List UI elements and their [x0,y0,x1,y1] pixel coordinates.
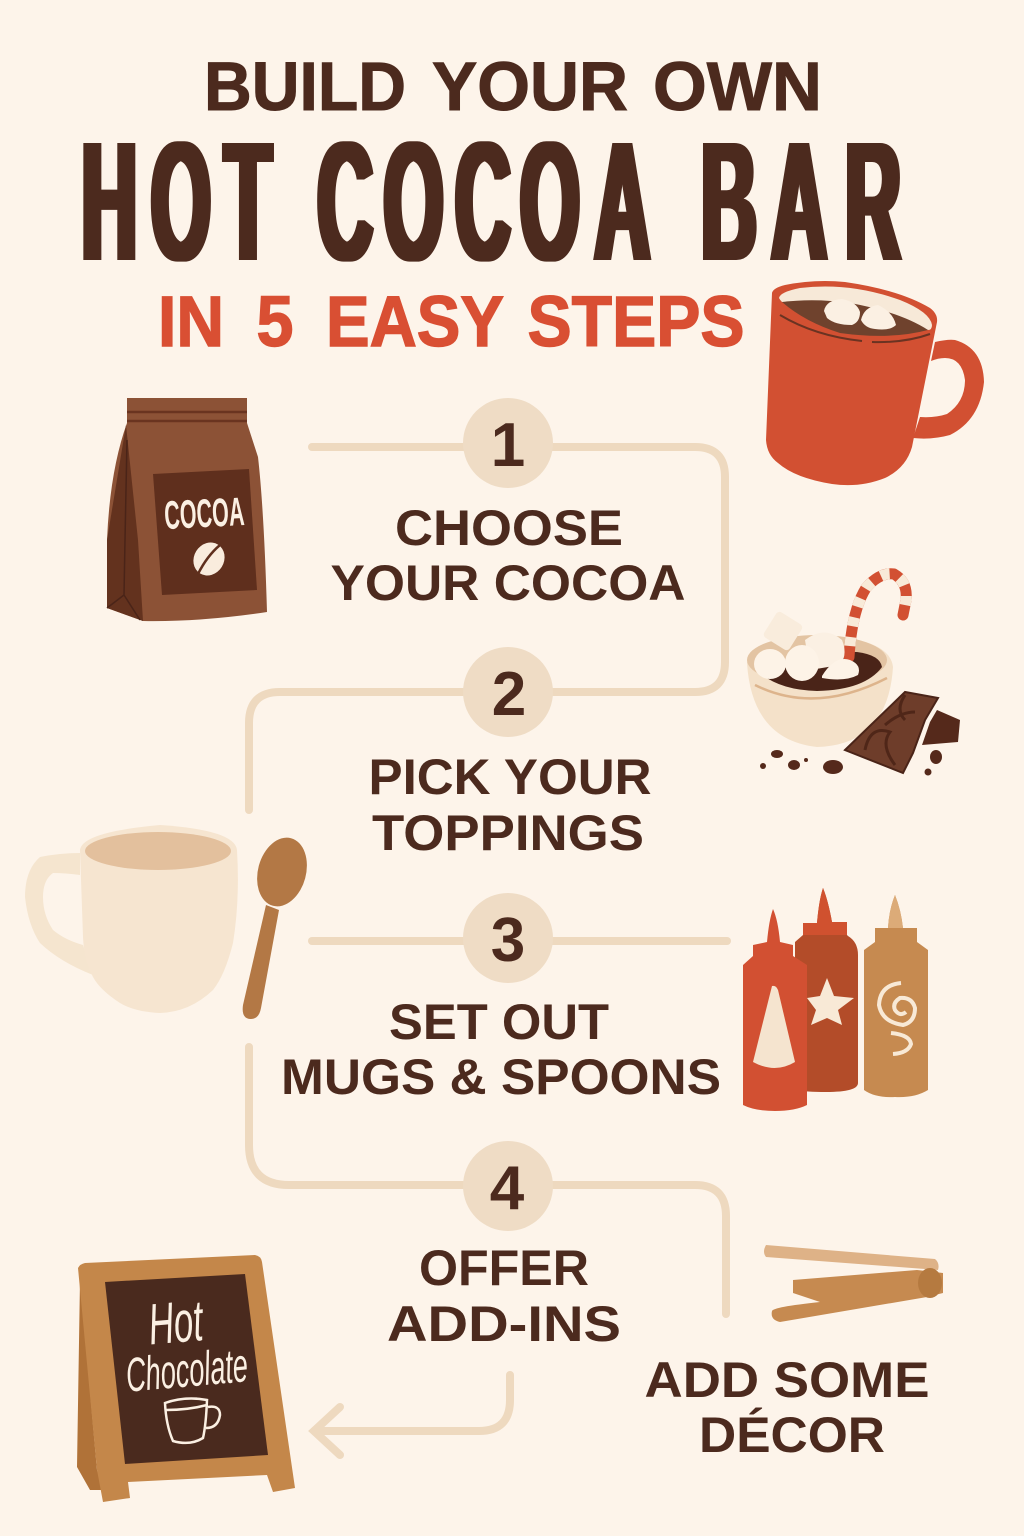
subtitle: in 5 easy steps [158,283,744,362]
title: build your own: OWN [653,48,822,125]
title: build your own: BUILD [204,48,406,125]
step 1 [330,398,686,611]
step 3: MUGS & SPOONS [281,1049,721,1105]
step 4: ADD-INS [387,1296,621,1352]
connector path [249,447,727,1455]
icon: hot chocolate sign: Chocolate [124,1339,250,1403]
icon: syrup bottles [743,888,928,1111]
step 3: SET OUT [389,994,609,1050]
step 5: add some decor: ADD SOME [644,1352,930,1408]
step 2: PICK YOUR [368,749,652,805]
step 1: YOUR COCOA [330,555,686,611]
title: hot cocoa bar: BAR [701,107,901,296]
step 3: 3 [491,906,525,975]
title: hot cocoa bar: COCOA [318,107,650,296]
step 2: TOPPINGS [372,805,644,861]
icon: bowl with marshmallows, candy cane, chocolate [747,574,960,776]
step 4 [387,1141,621,1352]
icon: red mug with marshmallows [766,281,984,485]
step 4: 4 [490,1154,525,1223]
icon: wooden spoon [243,832,314,1019]
step 5: add some decor: DÉCOR [699,1407,885,1463]
icon: cocoa bag [107,398,267,621]
subtitle: in 5 easy steps: 5 [256,283,294,362]
subtitle: in 5 easy steps: EASY [326,283,504,362]
step 2: 2 [492,660,526,729]
title: hot cocoa bar [82,107,901,296]
step 4: OFFER [419,1240,589,1296]
icon: cocoa bag: COCOA [163,490,245,538]
icon: hot chocolate sign: Hot [146,1288,207,1358]
title: build your own [204,48,822,125]
subtitle: in 5 easy steps: STEPS [528,283,744,362]
icon: cinnamon sticks [764,1245,943,1322]
icon: cream mug [25,825,238,1013]
step 1: 1 [491,411,525,480]
title: build your own: YOUR [432,48,628,125]
step 2 [368,647,652,861]
title: hot cocoa bar: HOT [82,107,271,296]
step 5: add some decor [644,1352,930,1463]
step 1: CHOOSE [395,500,623,556]
step 3 [281,893,721,1105]
subtitle: in 5 easy steps: IN [158,283,224,362]
icon: hot chocolate sign [77,1255,295,1502]
